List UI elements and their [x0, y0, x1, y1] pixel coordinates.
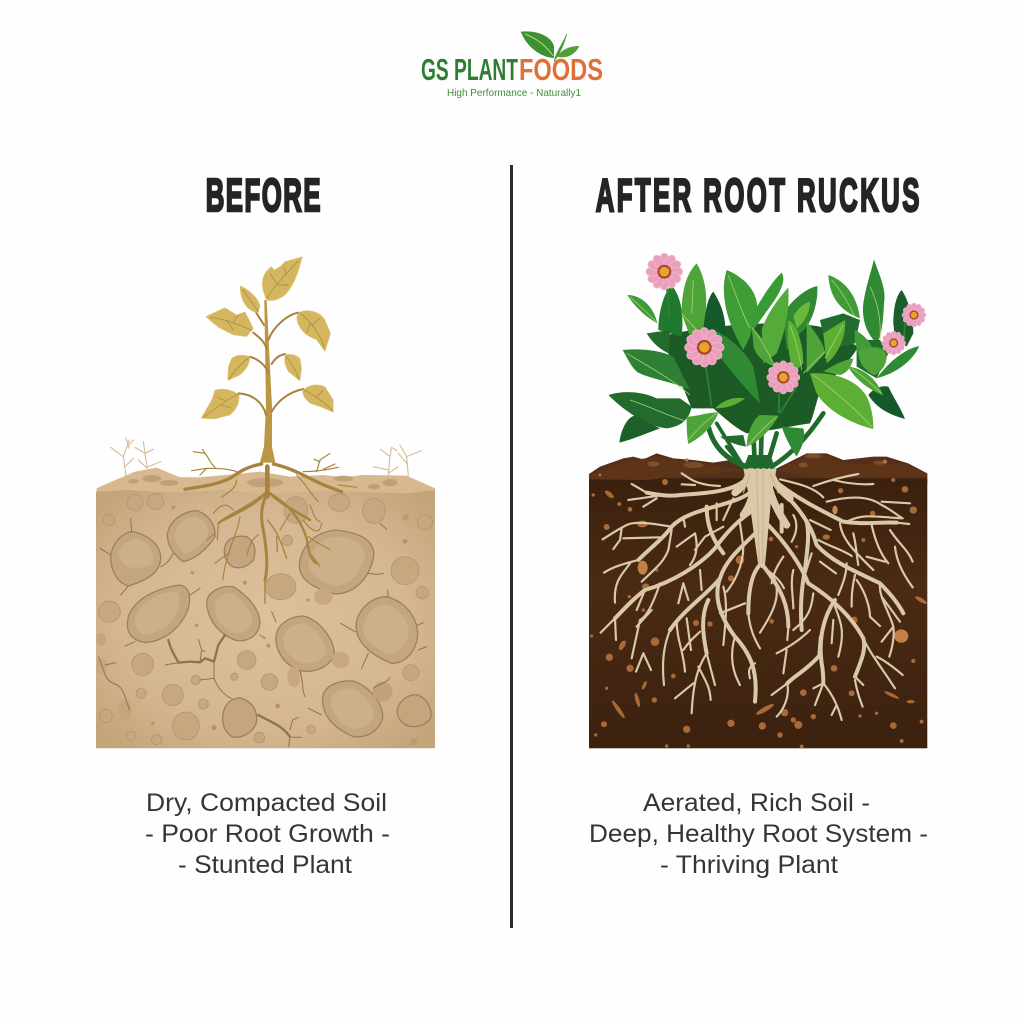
divider [510, 165, 513, 928]
heading: after root ruckus: AFTER ROOT RUCKUS [596, 169, 919, 221]
bare twigs [111, 438, 422, 476]
big clods [111, 511, 431, 737]
heading: before: BEFORE [206, 169, 320, 221]
panel: after soil [589, 253, 928, 749]
leaf veins [627, 275, 882, 445]
stems [708, 413, 823, 467]
flowers [646, 253, 926, 394]
dry roots [185, 449, 357, 520]
dry leaves [201, 257, 333, 419]
caption: after: - Thriving Plant [660, 851, 838, 879]
icon: logo leaves [521, 31, 579, 62]
thriving plant [608, 253, 926, 468]
caption: after: Deep, Healthy Root System - [589, 820, 928, 848]
dark foliage mass [660, 323, 858, 433]
logo wordmark: GS PLANT [421, 52, 518, 87]
caption: before: Dry, Compacted Soil [146, 789, 387, 817]
caption: after: Aerated, Rich Soil - [643, 789, 870, 817]
panel: before soil [96, 257, 435, 748]
logo [421, 31, 603, 99]
soil cracks [98, 518, 427, 747]
dry plant [111, 257, 422, 520]
dry soil surface [97, 468, 435, 497]
dry soil block with clods [96, 490, 435, 748]
caption: before: - Stunted Plant [178, 851, 352, 879]
small clods [96, 494, 433, 745]
stem and branches [238, 300, 303, 463]
rich soil block [589, 453, 928, 749]
caption: after [589, 789, 928, 879]
logo tagline: High Performance - Naturally1 [447, 87, 581, 99]
caption: before [145, 789, 390, 879]
caption: before: - Poor Root Growth - [145, 820, 390, 848]
logo wordmark: FOODS [519, 52, 603, 87]
foliage leaves [608, 259, 919, 457]
dry roots in soil [207, 480, 330, 603]
healthy root system [601, 468, 913, 720]
soil specks [590, 478, 928, 749]
flower stems [667, 283, 905, 413]
